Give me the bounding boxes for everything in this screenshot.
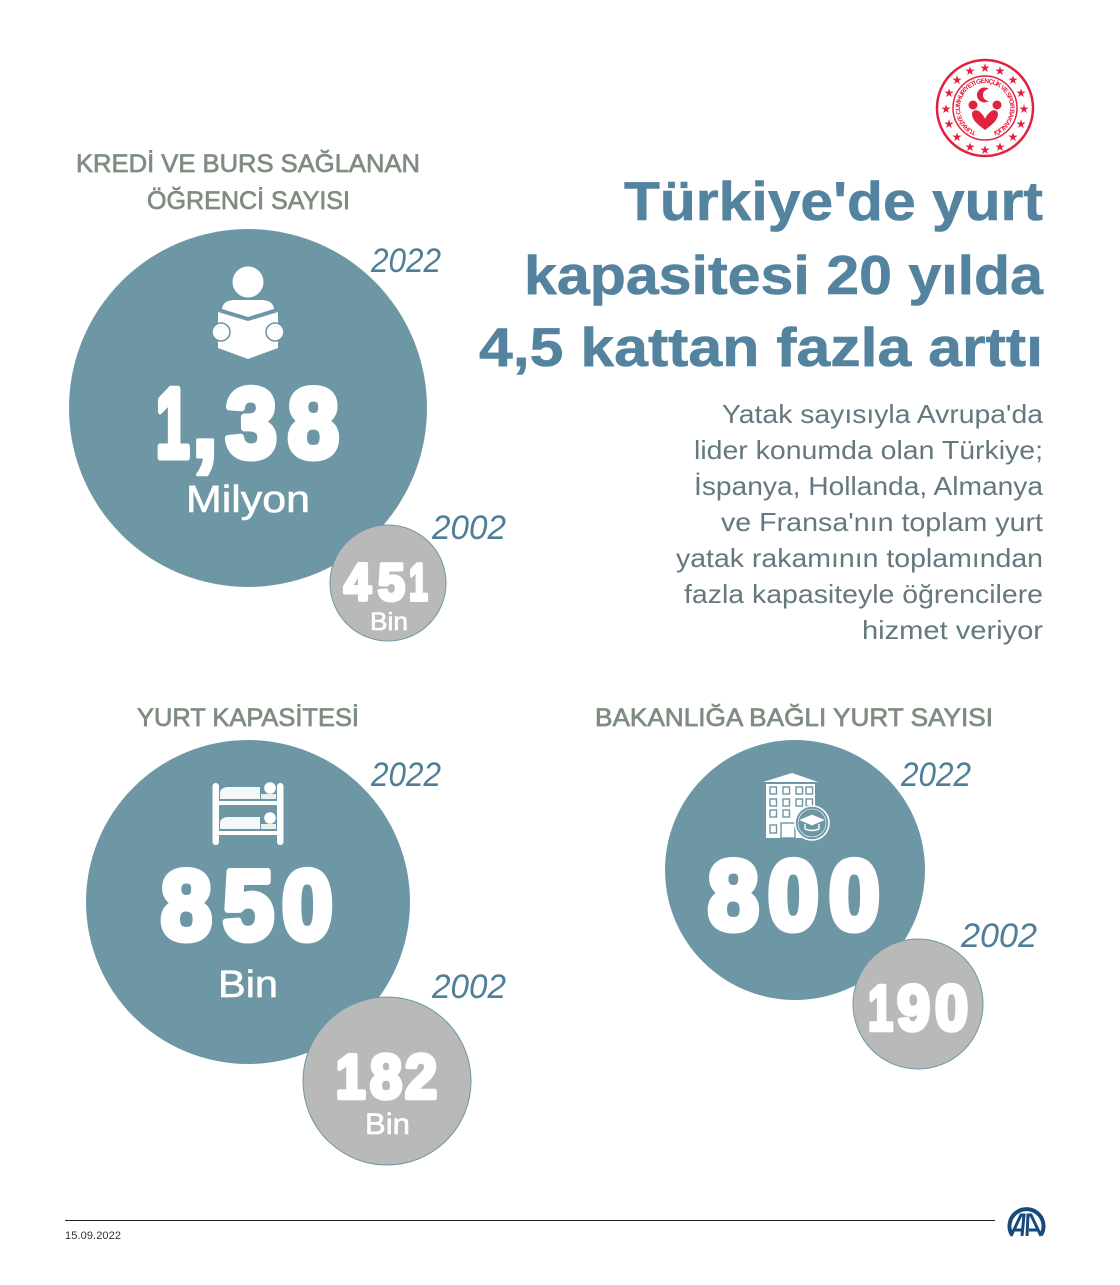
number: 190: 1 [868,973,893,1044]
year: 2022 students: 2022 [370,242,441,280]
number: 190: 9 [897,973,930,1044]
year: 2002 dorms: 2002 [960,917,1037,955]
unit: Bin: Bin [218,964,278,1006]
number: 1,38: 3 [226,369,277,479]
logo: ministry seal: ★ [1016,117,1026,131]
number: 182: 2 [405,1042,437,1111]
number: 182: 8 [370,1042,402,1111]
panel: students 2022 [69,229,427,587]
number: 850: 0 [282,851,333,961]
body text: fazla kapasiteyle öğrencilere [684,579,1043,609]
logo: ministry seal: ★ [980,61,990,75]
body text: İspanya, Hollanda, Almanya [694,471,1044,501]
logo: AA [1010,1209,1044,1236]
logo: ministry seal: TÜRKİYE CUMHURİYETİ GENÇLİK VE SPOR BAKANLIĞI [956,78,1014,136]
number: 1,38: 8 [288,369,339,479]
logo: ministry seal: ★ [995,140,1005,154]
logo: ministry seal: ★ [965,64,975,78]
unit: Bin: Bin [370,608,408,636]
number: 1,38: , [190,352,220,482]
panel: students 2002 [330,525,446,641]
logo: ministry seal: ★ [944,117,954,131]
footer line [65,1220,995,1221]
icon: reading person [212,266,284,359]
unit: Milyon: Milyon [186,479,310,521]
number: 800: 0 [829,841,880,951]
logo: ministry seal: ★ [995,64,1005,78]
heading: number of dorms: BAKANLIĞA BAĞLI YURT SAYISI [595,703,993,732]
body text: Yatak sayısıyla Avrupa'da [722,399,1044,429]
panel: capacity 2002 [303,997,471,1165]
logo: ministry seal: ★ [1019,102,1029,116]
panel: capacity 2022 [86,740,410,1064]
logo: ministry seal: ★ [1008,73,1018,87]
logo: ministry seal: ★ [944,86,954,100]
footer date: 15.09.2022 [65,1230,121,1242]
number: 190: 0 [935,973,968,1044]
number: 1,38: 1 [156,369,189,479]
year: 2002 students: 2002 [431,509,506,547]
body text [676,399,1044,645]
heading: dorm capacity: YURT KAPASİTESİ [137,703,359,732]
body text: ve Fransa'nın toplam yurt [721,507,1044,537]
title: 4,5 kattan fazla arttı [479,316,1043,378]
number: 850: 8 [161,851,212,961]
logo: ministry seal: ★ [980,143,990,157]
number: 182: 1 [336,1042,365,1111]
panel: dorms 2022 [665,740,925,1000]
title: Türkiye'de yurt [624,170,1043,232]
year: 2022 dorms: 2022 [900,756,971,794]
number: 451: 4 [344,553,371,611]
logo: ministry seal: ★ [952,73,962,87]
logo: ministry seal: ★ [952,130,962,144]
number: 800: 8 [708,841,759,951]
heading: credit and scholarship [76,149,420,215]
icon: building with graduation cap [763,773,829,840]
year: 2022 capacity: 2022 [370,756,441,794]
number: 451: 1 [409,553,428,611]
year: 2002 capacity: 2002 [431,968,506,1006]
heading: credit and scholarship: KREDİ VE BURS SAĞLANAN [76,149,420,178]
body text: lider konumda olan Türkiye; [694,435,1043,465]
panel: dorms 2002 [853,939,983,1069]
logo: ministry seal [936,58,1034,158]
logo: ministry seal: ★ [941,102,951,116]
number: 800: 0 [768,841,819,951]
logo: ministry seal: ★ [965,140,975,154]
body text: hizmet veriyor [862,615,1043,645]
heading: credit and scholarship: ÖĞRENCİ SAYISI [147,186,350,215]
body text: yatak rakamının toplamından [676,543,1043,573]
logo: ministry seal: ★ [1016,86,1026,100]
logo: ministry seal: ★ [1008,130,1018,144]
title: kapasitesi 20 yılda [524,244,1043,306]
title [479,170,1043,378]
number: 451: 5 [378,553,405,611]
unit: Bin: Bin [365,1108,410,1141]
number: 850: 5 [223,851,274,961]
icon: bunk bed [212,782,284,845]
